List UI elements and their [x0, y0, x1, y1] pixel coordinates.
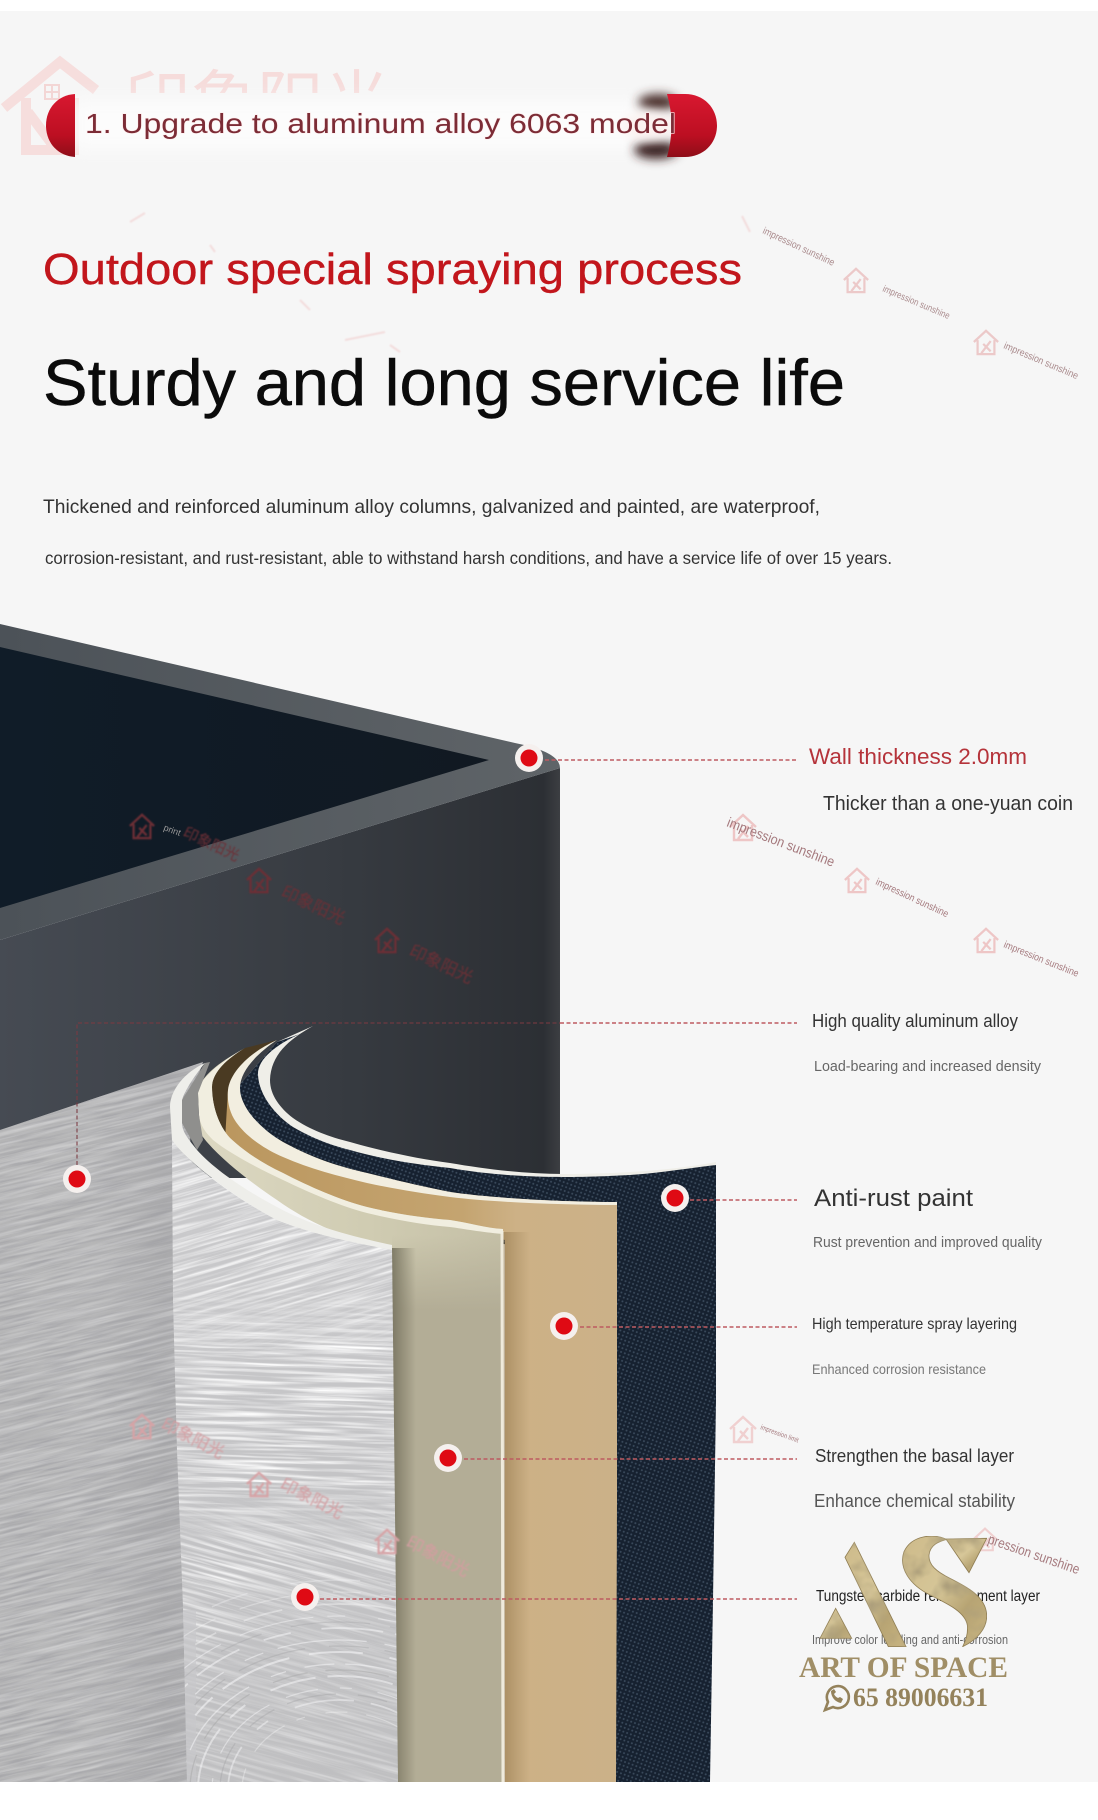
tan spray layer [225, 1090, 617, 1782]
label: basal layer [814, 1446, 1015, 1511]
watermarks: lower right [730, 1417, 1082, 1577]
watermarks: upper right: impression sunshine [881, 284, 951, 322]
bottom white band [0, 1782, 1098, 1820]
badge: aluminum alloy 6063 model [46, 94, 717, 159]
marker: tungsten carbide layer [291, 1583, 319, 1611]
watermarks: middle right: impression sunshine [725, 814, 837, 870]
label: tungsten carbide layer [812, 1588, 1040, 1647]
tube hollow interior [0, 647, 489, 908]
watermarks: middle right: impression sunshine [874, 877, 950, 920]
watermark on tube [130, 815, 476, 987]
label: high quality aluminum alloy: High quality aluminum alloy [812, 1011, 1018, 1031]
watermark on tube: 印象阳光 [278, 882, 348, 928]
watermark on silver sheet [130, 1415, 472, 1580]
logo wordmark: ART OF SPACE [799, 1651, 1008, 1684]
badge right cap [667, 94, 717, 157]
olive layer top face [198, 1048, 504, 1782]
label: high quality aluminum alloy: Load-bearing and increased density [814, 1058, 1041, 1075]
marker: basal layer [434, 1444, 462, 1472]
label: tungsten carbide layer: Tungsten carbide reinforcement layer [816, 1588, 1040, 1605]
silver brushed sheet [172, 1140, 398, 1782]
label: anti-rust paint: Anti-rust paint [814, 1185, 973, 1212]
badge white fade [72, 100, 642, 150]
olive front shadow [392, 1248, 416, 1782]
tan layer white edge [228, 1040, 617, 1205]
watermark: large house and brand behind badge [4, 62, 390, 150]
body text: corrosion-resistant, and rust-resistant, able to withstand harsh conditions, and have a service life of over 15 years. [45, 548, 892, 568]
label: high temperature spray layering: High temperature spray layering [812, 1316, 1017, 1333]
body text: Thickened and reinforced aluminum alloy columns, galvanized and painted, are waterproof, [43, 496, 820, 518]
logo monogram [820, 1536, 987, 1647]
label: wall thickness [809, 744, 1073, 815]
marker: anti-rust paint [661, 1184, 689, 1212]
label: high temperature spray layering [812, 1316, 1017, 1377]
badge center glow [622, 112, 674, 140]
marker: spray layering [550, 1312, 578, 1340]
silver sheet white edge [170, 1063, 392, 1250]
watermark on tube: 印象阳光 [180, 824, 242, 865]
label: tungsten carbide layer: Improve color leveling and anti-corrosion [812, 1632, 1008, 1647]
watermarks: lower right: pression sunshine [986, 1531, 1082, 1577]
watermarks: upper right: impression sunshine [761, 226, 836, 269]
label: wall thickness: Wall thickness 2.0mm [809, 744, 1027, 769]
heading: Sturdy and long service life: Sturdy and long service life [43, 346, 845, 419]
watermark on silver sheet: 印象阳光 [158, 1415, 227, 1462]
marker: aluminum alloy [63, 1165, 91, 1193]
watermarks: upper right: impression sunshine [1002, 341, 1080, 382]
faint smudged watermarks near headings [130, 213, 750, 352]
label: anti-rust paint: Rust prevention and improved quality [813, 1235, 1043, 1251]
tube front face [0, 768, 560, 1178]
brushed backdrop panel [0, 1050, 205, 1785]
tan layer gap shadow [212, 1040, 277, 1138]
navy anti-rust layer [235, 1034, 716, 1782]
heading: Outdoor special spraying process: Outdoor special spraying process [43, 245, 742, 294]
watermark on tube: 印象阳光 [406, 941, 476, 987]
label: high temperature spray layering: Enhanced corrosion resistance [812, 1361, 986, 1377]
watermark small label on tube: print [162, 822, 183, 838]
olive layer white edge [198, 1048, 503, 1234]
watermarks: middle right: impression sunshine [1002, 940, 1081, 980]
label: high quality aluminum alloy [812, 1011, 1041, 1075]
watermark: large house and brand behind badge: 印象阳光 [124, 65, 390, 143]
olive layer front [392, 1235, 503, 1782]
badge label: 1. Upgrade to aluminum alloy 6063 model [85, 108, 676, 139]
watermarks: upper right [761, 226, 1080, 382]
logo phone number: 65 89006631 [853, 1683, 988, 1712]
marker dots [63, 744, 689, 1611]
icon: WhatsApp [825, 1686, 849, 1710]
body text [43, 496, 892, 568]
swirling brushed arcs [184, 1580, 398, 1782]
aluminum tube product illustration [0, 624, 716, 1790]
logo: Art of Space [799, 1536, 1008, 1712]
badge left cap [46, 94, 75, 157]
watermarks: lower right: impression limit [759, 1424, 799, 1445]
silver inner gap [182, 1062, 210, 1150]
marker: wall thickness [515, 744, 543, 772]
tan front shadow [503, 1232, 530, 1782]
label: anti-rust paint [813, 1185, 1043, 1251]
soft lower-left sheet zone [184, 1610, 196, 1765]
watermarks: middle right [725, 814, 1081, 980]
darker swirl grooves [184, 1622, 396, 1782]
olive right white edge [502, 1231, 503, 1782]
watermark on silver sheet: 印象阳光 [403, 1533, 472, 1580]
watermark on silver sheet: 印象阳光 [277, 1475, 346, 1522]
label: wall thickness: Thicker than a one-yuan coin [823, 793, 1073, 815]
tube rim [0, 624, 560, 940]
navy layer white edge [235, 1026, 716, 1210]
dashed leader lines [77, 760, 797, 1599]
label: basal layer: Enhance chemical stability [814, 1491, 1015, 1511]
badge dark smudges [634, 94, 678, 159]
label: basal layer: Strengthen the basal layer [815, 1446, 1014, 1466]
